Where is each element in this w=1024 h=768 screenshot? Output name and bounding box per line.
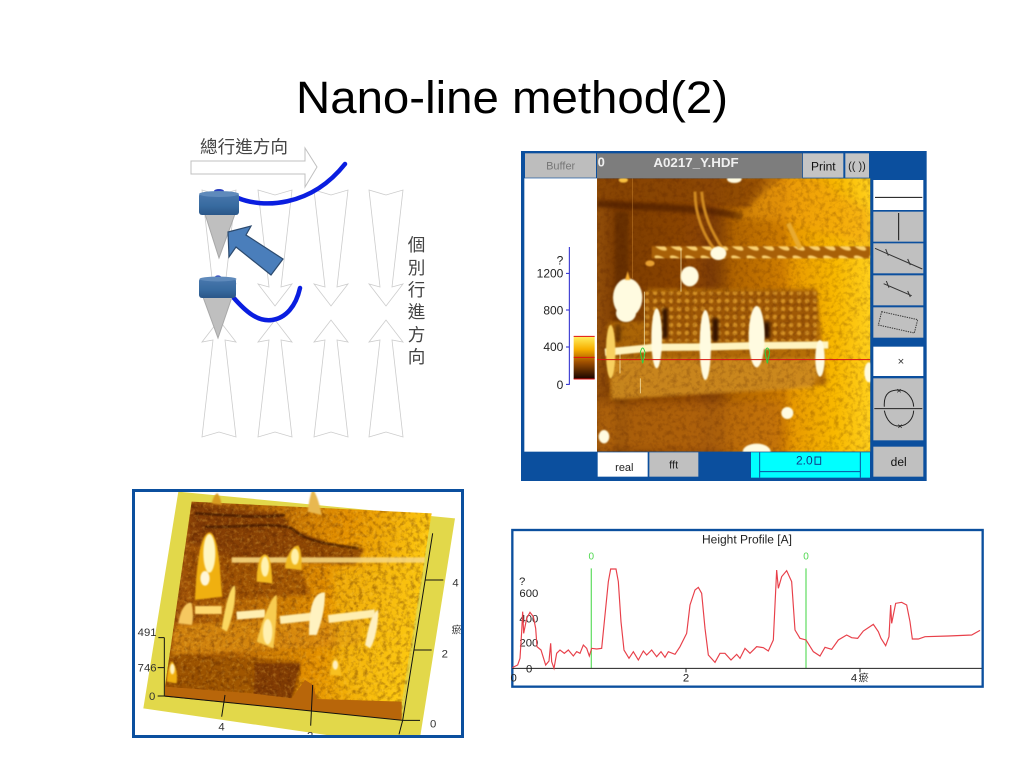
tab: fft	[649, 452, 698, 477]
title: Nano-line method(2)	[296, 72, 728, 123]
dark gaps	[615, 308, 770, 342]
axes: 瘀	[859, 672, 869, 685]
green cursors: 0	[589, 552, 595, 563]
axis labels: 4	[218, 721, 225, 733]
bright particles	[599, 175, 874, 460]
axes: 600	[519, 588, 538, 600]
axis labels: 491	[138, 627, 157, 639]
axis labels: 0	[149, 691, 155, 703]
label: overall travel direction: 總行進方向	[200, 137, 288, 157]
green cursors	[589, 552, 809, 668]
panel: colour scale: 400	[543, 340, 564, 354]
scale bar	[751, 452, 870, 478]
axis labels: 0	[430, 719, 436, 731]
strands	[695, 192, 722, 250]
rope line	[652, 246, 870, 258]
tab: real	[598, 452, 648, 477]
top band	[597, 178, 782, 208]
axes: 0	[526, 663, 532, 675]
button: Buffer	[525, 153, 596, 178]
green cursors: 0	[803, 552, 809, 563]
axis labels	[138, 578, 462, 743]
3D surface	[158, 498, 438, 720]
label: individual travel direction: 行	[408, 280, 425, 300]
tab: fft: fft	[669, 459, 678, 471]
label: individual travel direction: 個	[408, 235, 425, 255]
icon: lower probe tip	[199, 275, 236, 338]
axes	[511, 576, 982, 685]
AFM height image	[597, 175, 874, 460]
panel: colour scale: ?	[557, 253, 564, 267]
arrows: upward scan lines	[202, 320, 403, 437]
label: individual travel direction: 向	[408, 347, 425, 367]
axes: 400	[519, 613, 538, 625]
woven nanostructure	[607, 288, 827, 400]
chart frame	[512, 530, 983, 687]
arrow: blue movement arrow	[228, 226, 283, 275]
title bar: 0	[598, 154, 605, 169]
label: individual travel direction: 方	[408, 325, 425, 345]
surface peaks	[167, 490, 378, 683]
green markers	[640, 348, 770, 363]
axes: ?	[519, 576, 525, 588]
tool buttons: ×	[896, 386, 902, 396]
chart title: Height Profile [A]	[702, 533, 792, 547]
button: zoom toggle	[845, 153, 869, 178]
panel: colour scale: 1200	[537, 267, 564, 281]
button: del: del	[891, 455, 907, 469]
height profile line	[512, 569, 980, 668]
axes: 0	[511, 673, 517, 685]
panel: colour scale: 0	[557, 378, 564, 392]
scale bar: 2.0	[796, 453, 813, 467]
panel: 3D surface plot	[134, 490, 462, 748]
arrow: overall travel direction	[191, 148, 317, 187]
axes: 200	[519, 637, 538, 649]
button: zoom toggle: (( ))	[848, 161, 866, 173]
tool buttons	[873, 180, 923, 440]
button: Print	[803, 153, 843, 178]
tab: real: real	[615, 462, 633, 474]
icon: lower cantilever	[233, 288, 300, 320]
plot frame	[134, 490, 462, 736]
axes: 2	[683, 673, 689, 685]
horizontal bright line	[605, 345, 828, 352]
axes: 4	[851, 673, 857, 685]
window frame	[521, 151, 927, 481]
surface texture	[158, 498, 438, 698]
axis labels: 瘀	[452, 624, 462, 637]
button: Print: Print	[811, 159, 836, 173]
tool buttons: ×	[898, 356, 904, 368]
yellow base plane	[143, 492, 455, 748]
icon: upper probe tip	[199, 189, 239, 258]
panel: colour scale: 800	[543, 303, 564, 317]
vertical scan artefacts	[620, 248, 681, 393]
plot axes	[158, 533, 443, 734]
title bar	[597, 153, 802, 178]
panel: AFM scan window	[521, 151, 927, 481]
button: del	[873, 447, 923, 477]
icon: upper cantilever	[238, 164, 345, 203]
label: individual travel direction	[408, 235, 426, 367]
panel: colour scale	[524, 178, 597, 452]
title bar: A0217_Y.HDF	[653, 155, 739, 170]
axis labels: 746	[138, 663, 157, 675]
axis labels: 2	[307, 731, 313, 743]
arrows: downward scan lines	[202, 190, 403, 306]
axis labels: 2	[442, 649, 448, 661]
panel: scanning direction diagram	[191, 137, 426, 437]
label: individual travel direction: 別	[408, 258, 425, 278]
profile cursor line	[597, 359, 870, 360]
button: Buffer: Buffer	[546, 161, 576, 173]
label: individual travel direction: 進	[408, 302, 426, 322]
image texture	[597, 178, 870, 452]
axis labels: 4	[452, 578, 459, 590]
tool buttons: ×	[897, 421, 903, 431]
chart: height profile	[511, 530, 983, 687]
